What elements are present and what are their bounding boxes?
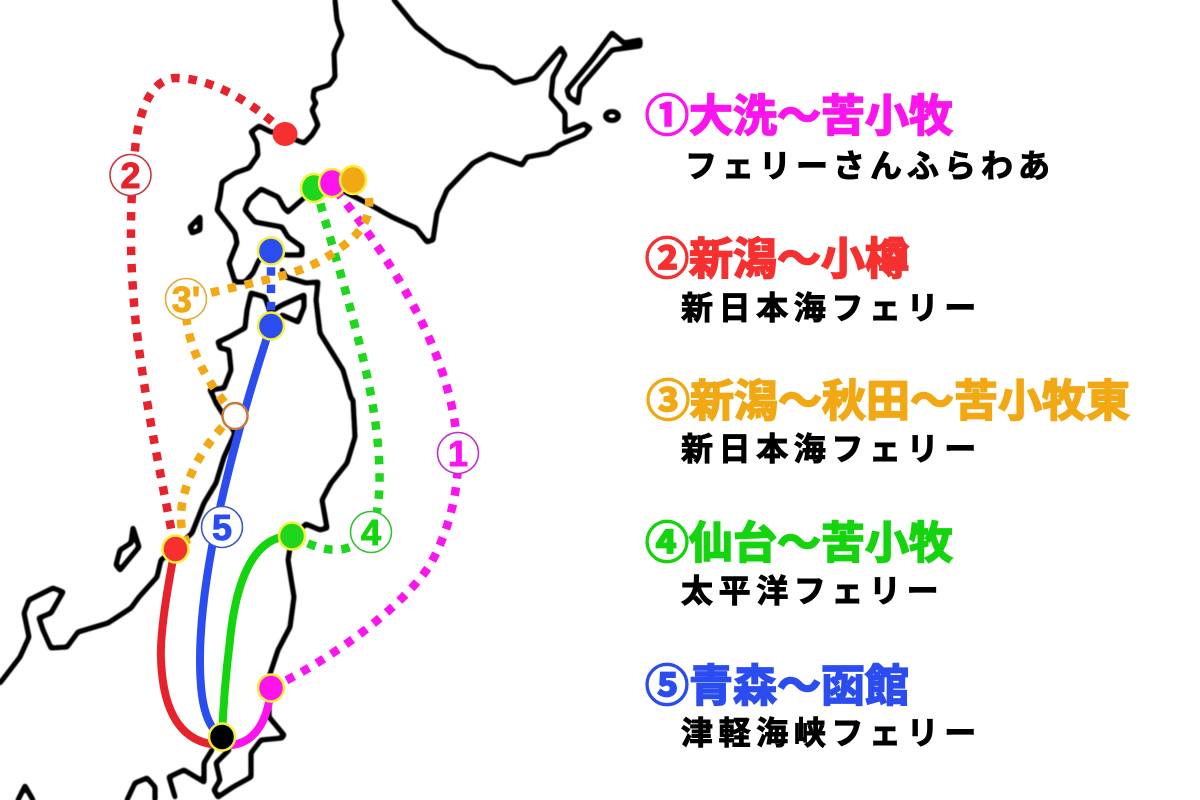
map label: route 2: 2	[120, 155, 141, 196]
legend: route 1	[645, 92, 1055, 184]
legend: route 3: 新日本海フェリー	[681, 431, 982, 467]
legend: route 4	[645, 519, 953, 609]
map label: route 3 prime	[166, 278, 206, 320]
legend: route 1: ①大洗～苦小牧	[645, 92, 953, 141]
legend: route 2: 新日本海フェリー	[681, 290, 982, 326]
legend: route 5: 津軽海峡フェリー	[681, 715, 982, 751]
legend: route 5: ⑤青森～函館	[645, 662, 909, 711]
legend: route 3: ③新潟～秋田～苦小牧東	[646, 377, 1130, 426]
port markers	[162, 122, 366, 750]
legend: route 4: ④仙台～苦小牧	[645, 519, 953, 568]
route 2: Niigata to Otaru	[131, 78, 285, 745]
map: coastlines	[0, 0, 640, 800]
route 5: Aomori to Hakodate	[200, 250, 271, 738]
route 3: Niigata to Akita to Tomakomai-higashi	[181, 198, 369, 547]
map label: route 4: 4	[361, 512, 381, 553]
map label: route 3 prime: 3'	[172, 279, 200, 320]
legend: route 1: フェリーさんふらわあ	[685, 148, 1055, 184]
map label: route 2	[110, 154, 151, 196]
map label: route 1: 1	[448, 433, 468, 474]
legend: route 5	[645, 662, 982, 751]
legend: route 4: 太平洋フェリー	[681, 573, 944, 609]
map label: route 1	[438, 432, 478, 474]
map label: route 5: 5	[212, 507, 232, 548]
legend: route 2	[645, 235, 982, 326]
route 1: Oarai to Tomakomai	[222, 184, 458, 745]
map label: route 4	[350, 512, 392, 553]
legend: route 2: ②新潟～小樽	[645, 235, 909, 284]
legend: route 3	[646, 377, 1130, 467]
map label: route 5	[202, 506, 242, 548]
route 4: Sendai to Tomakomai	[222, 195, 380, 738]
